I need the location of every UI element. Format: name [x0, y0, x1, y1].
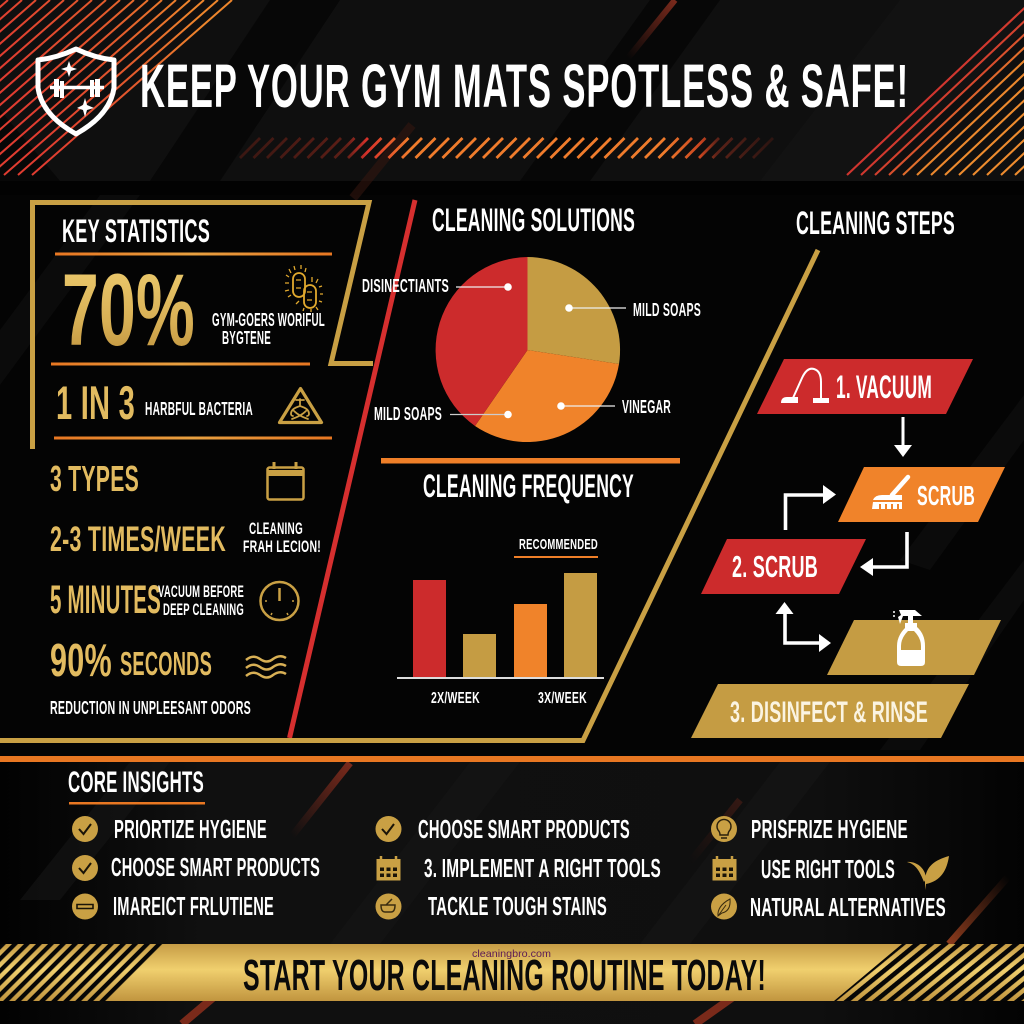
pie chart	[362, 257, 701, 442]
item: impact: IMAREICT FRLUTIENE	[113, 891, 274, 921]
panel: core insights	[68, 766, 949, 922]
step 3: disinfect and rinse	[691, 684, 969, 738]
text: vacuum before deep cleaning: DEEP CLEANING	[163, 601, 244, 619]
icon: spray bottle	[893, 610, 925, 666]
recommended label	[514, 536, 598, 558]
icon: leaves	[907, 856, 949, 890]
callout: disinfectants: DISINECTIANTS	[362, 276, 449, 296]
item: implement right tools	[376, 853, 661, 883]
stat: 5 minutes: 5 MINUTES	[50, 578, 161, 622]
item: choose smart products column 2	[376, 814, 630, 844]
banner left stripes	[0, 944, 164, 1001]
item: choose smart products column 2: CHOOSE SMART PRODUCTS	[418, 814, 630, 844]
stat: 90% seconds	[50, 634, 212, 686]
text: gym-goers	[212, 310, 325, 348]
recommended label: RECOMMENDED	[519, 536, 598, 553]
panel: cleaning solutions	[362, 202, 701, 464]
icon: biohazard triangle	[280, 388, 322, 422]
stat: 1 in 3: 1 IN 3	[56, 376, 135, 429]
heading: core insights: CORE INSIGHTS	[68, 766, 204, 799]
stat: 90% seconds: 90%	[50, 634, 112, 686]
item: prioritize hygiene	[72, 814, 267, 844]
step 2: scrub	[701, 539, 866, 594]
step: scrub orange	[838, 467, 1005, 522]
item: natural alternatives	[711, 892, 946, 922]
item: prioritize hygiene column 3	[711, 814, 908, 844]
text: cleaning frequency	[243, 520, 321, 556]
callout: vinegar: VINEGAR	[622, 397, 671, 417]
icon: calendar	[267, 462, 304, 500]
item: use right tools	[712, 854, 895, 884]
icon: vacuum	[781, 369, 829, 403]
heading: cleaning solutions: CLEANING SOLUTIONS	[432, 202, 635, 238]
stat: 3 types: 3 TYPES	[50, 458, 139, 499]
bar chart	[397, 573, 604, 707]
panel: cleaning frequency	[397, 468, 634, 707]
step 2: scrub: 2. SCRUB	[732, 549, 818, 584]
arrow: down then left	[860, 532, 907, 576]
panel frame	[32, 202, 373, 449]
stat: 2-3 times per week: 2-3 TIMES/WEEK	[50, 520, 226, 559]
arrow: up then right	[786, 485, 836, 530]
item: choose smart products	[72, 852, 320, 882]
item: tackle tough stains: TACKLE TOUGH STAINS	[428, 891, 607, 921]
gold frame: bottom and diagonal	[0, 250, 818, 740]
item: choose smart products: CHOOSE SMART PRODUCTS	[111, 852, 320, 882]
banner right stripes	[834, 944, 1024, 1001]
banner: call to action	[0, 944, 1024, 1001]
icon: brush	[872, 477, 908, 509]
axis label: 3x/week: 3X/WEEK	[538, 690, 587, 707]
callout: mild soaps right	[565, 300, 701, 320]
item: use right tools: USE RIGHT TOOLS	[761, 854, 895, 884]
item: tackle tough stains	[376, 891, 607, 921]
text: vacuum before deep cleaning: VACUUM BEFORE	[158, 583, 244, 601]
left diagonal stripes	[0, 0, 232, 175]
central hatch strip	[240, 138, 773, 158]
icon: shield with dumbbell	[38, 49, 114, 134]
arrow: down	[894, 417, 912, 457]
text: gym-goers: GYM-GOERS WORIFUL	[212, 310, 325, 330]
step: spray panel	[827, 610, 1001, 675]
source credit: cleaningbro.com	[472, 948, 551, 960]
step 1: vacuum	[757, 359, 973, 414]
stat: 70%: 70%	[62, 253, 195, 367]
axis label: 2x/week: 2X/WEEK	[431, 690, 480, 707]
divider: red diagonal	[290, 200, 415, 738]
step 1: vacuum: 1. VACUUM	[836, 369, 932, 405]
item: prioritize hygiene: PRIORTIZE HYGIENE	[114, 814, 267, 844]
text: harmful bacteria: HARBFUL BACTERIA	[145, 399, 253, 419]
orange divider	[0, 756, 1024, 762]
text: vacuum before deep cleaning	[158, 583, 244, 619]
right diagonal stripes	[847, 0, 1024, 175]
item: impact	[72, 891, 274, 921]
icon: bacteria	[285, 265, 323, 312]
text: gym-goers: BYGTENE	[222, 328, 271, 348]
callout: mild soaps right: MILD SOAPS	[633, 300, 701, 320]
step: scrub orange: SCRUB	[917, 480, 975, 511]
callout: vinegar	[557, 397, 671, 417]
text: odor reduction: REDUCTION IN UNPLEESANT ODORS	[50, 698, 251, 718]
header	[0, 0, 1024, 175]
panel: key statistics	[32, 202, 373, 718]
text: cleaning frequency: FRAH LECION!	[243, 538, 321, 556]
item: prioritize hygiene column 3: PRISFRIZE HYGIENE	[751, 814, 908, 844]
callout: mild soaps left: MILD SOAPS	[374, 404, 442, 424]
arrow: two-way	[776, 602, 831, 652]
item: implement right tools: 3. IMPLEMENT A RIGHT TOOLS	[424, 853, 661, 883]
icon: clock	[260, 582, 298, 620]
heading: cleaning frequency: CLEANING FREQUENCY	[423, 468, 634, 504]
icon: odor waves	[246, 656, 286, 678]
heading: key statistics: KEY STATISTICS	[62, 213, 210, 249]
text: cleaning frequency: CLEANING	[249, 520, 303, 538]
stat: 90% seconds: SECONDS	[120, 645, 212, 682]
panel: cleaning steps	[691, 205, 1005, 738]
